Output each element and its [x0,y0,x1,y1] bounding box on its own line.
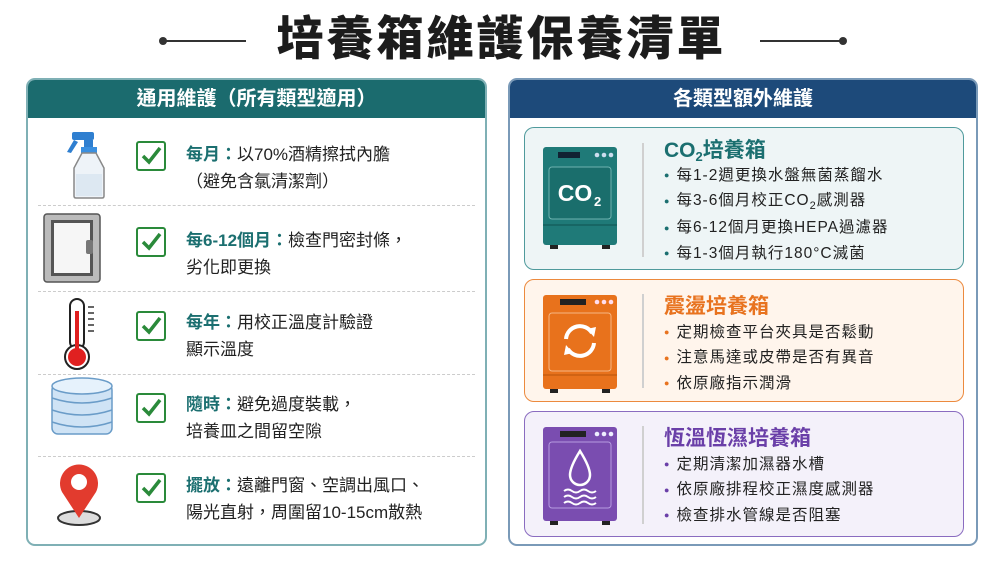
bullet list [664,456,874,524]
text: 每月：以70%酒精擦拭內膽 [186,145,390,164]
heading: general: 通用維護（所有類型適用） [136,88,376,110]
icon: CO2 incubator: 2 [594,194,601,209]
text: 顯示溫度 [186,340,254,359]
card: shaking incubator [524,279,964,402]
checkbox [136,311,166,341]
panel: general maintenance [26,78,487,546]
text: （避免含氯清潔劑） [186,172,339,191]
card: temperature/humidity incubator [524,411,964,537]
text [186,476,424,522]
text: 擺放：遠離門窗、空調出風口、 [186,476,424,495]
text: 陽光直射，周圍留10-15cm散熱 [186,503,422,522]
bullet list: ● 定期清潔加濕器水槽 [664,456,825,473]
heading: type-specific [510,80,976,118]
bullet list: ● 檢查排水管線是否阻塞 [664,507,841,524]
bullet list: ● 每6-12個月更換HEPA過濾器 [664,219,889,236]
icon: location pin [57,464,101,526]
text: 每6-12個月：檢查門密封條， [186,231,407,250]
row 2 [43,213,407,283]
title decoration right [760,37,847,45]
bullet list [664,324,874,392]
icon: door [43,213,101,283]
bullet list: ● 定期檢查平台夾具是否鬆動 [664,324,874,341]
text [186,313,373,359]
title decoration left [159,37,246,45]
icon: spray bottle [67,132,105,199]
title: 培養箱維護保養清單 [276,12,726,65]
row 3 [64,298,373,370]
row 4 [51,377,356,441]
checkbox [136,393,166,423]
checkbox [136,473,166,503]
icon: CO2 incubator: CO [558,180,592,206]
heading: general [28,80,485,118]
row 5 [57,464,424,526]
bullet list: ● 依原廠指示潤滑 [664,375,792,392]
row 1 [67,132,390,199]
icon: petri dishes [51,377,113,435]
bullet list [664,166,889,262]
icon: humidity incubator [543,427,617,525]
text: 劣化即更換 [186,258,271,277]
bullet list: ● 每3-6個月校正CO2感測器 [664,192,866,212]
text: 每年：用校正溫度計驗證 [186,313,373,332]
card title: 恆溫恆濕培養箱 [664,427,811,450]
text [186,145,390,191]
text: 隨時：避免過度裝載， [186,395,356,414]
icon: thermometer [64,298,94,370]
icon: CO2 incubator [543,147,617,249]
text [186,231,407,277]
bullet list: ● 每1-2週更換水盤無菌蒸餾水 [664,167,883,184]
panel: type-specific maintenance [508,78,978,546]
heading: type-specific: 各類型額外維護 [673,88,813,110]
card title: CO2培養箱 [664,139,766,164]
card: CO2 incubator [524,127,964,270]
checkbox [136,141,166,171]
checkbox [136,227,166,257]
bullet list: ● 每1-3個月執行180°C滅菌 [664,245,866,262]
bullet list: ● 依原廠排程校正濕度感測器 [664,481,874,498]
text [186,395,356,441]
text: 培養皿之間留空隙 [186,422,322,441]
icon: shaking incubator [543,295,617,393]
card title: 震盪培養箱 [664,295,769,318]
bullet list: ● 注意馬達或皮帶是否有異音 [664,349,874,366]
